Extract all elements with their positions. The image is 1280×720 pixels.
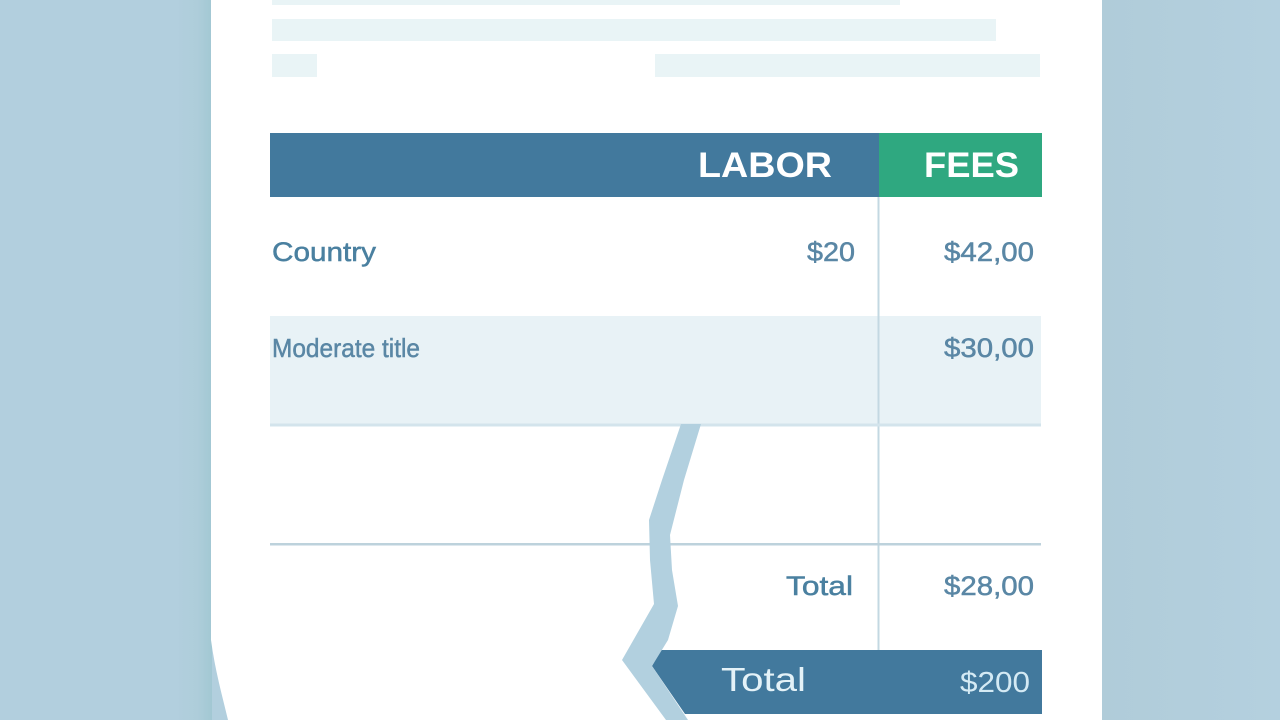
paper sheet [211, 0, 1102, 720]
row: moderate title: $30,00 [944, 333, 1034, 363]
redacted header lines [272, 0, 1040, 77]
table rules [270, 197, 1041, 650]
row: country: $42,00 [944, 237, 1034, 267]
row: moderate title: Moderate title [272, 333, 420, 363]
total bar: Total [721, 661, 806, 698]
row: total: Total [786, 571, 853, 601]
shaded table row [270, 316, 1041, 424]
total bar [652, 650, 1042, 714]
total bar: $200 [960, 667, 1030, 699]
row: country: Country [272, 237, 377, 267]
row: total: $28,00 [944, 571, 1034, 601]
row: country: $20 [807, 237, 855, 267]
row: country [272, 237, 1034, 267]
row: total [786, 571, 1034, 601]
table header: FEES [924, 146, 1019, 185]
paper tear [622, 424, 701, 720]
row: moderate title [272, 333, 1034, 363]
table header: LABOR [698, 146, 832, 185]
table header [270, 133, 1042, 197]
